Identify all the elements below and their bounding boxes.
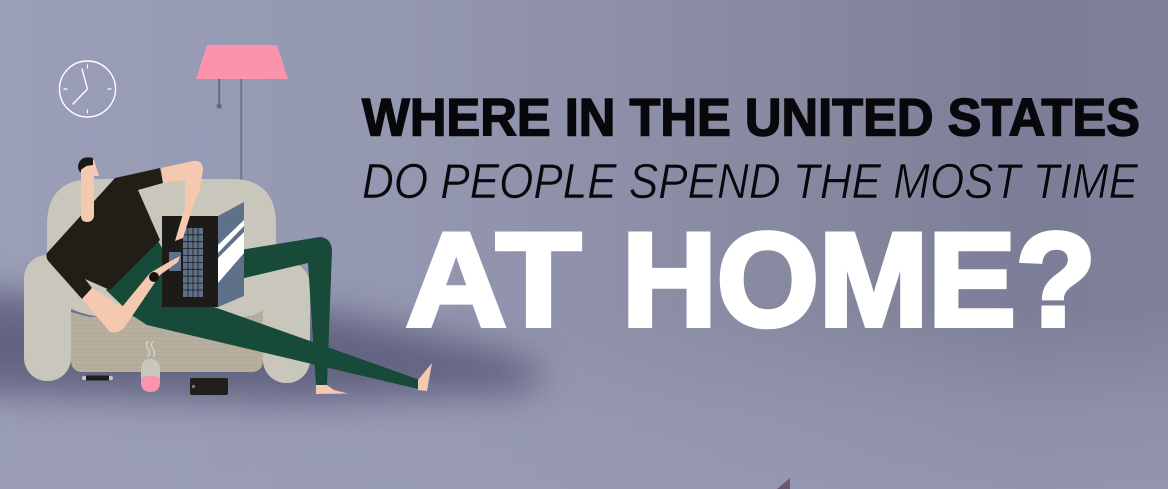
title line 3: AT (406, 206, 581, 354)
shirt (46, 168, 163, 299)
cropped map marker at bottom edge (777, 478, 790, 489)
foot: front (418, 363, 432, 391)
arm: lower, on laptop (82, 256, 180, 332)
illustration: person on sofa with laptop (46, 157, 432, 394)
illustration: sofa (24, 179, 310, 383)
front leg and hip (106, 235, 420, 389)
title line 1: WHERE IN THE UNITED STATES (362, 88, 1140, 147)
title line 3: HOME? (622, 206, 1096, 354)
foot: back (316, 385, 348, 394)
arm: upper, reaching to keyboard (161, 161, 203, 241)
head (78, 157, 99, 176)
laptop (162, 202, 244, 307)
icon: steaming mug (141, 341, 160, 392)
title (362, 88, 1140, 355)
watch (149, 272, 159, 282)
icon: wall clock (60, 61, 116, 117)
icon: floor lamp (196, 45, 288, 183)
arm: raised forearm (81, 166, 94, 222)
back leg (240, 237, 332, 385)
illustration: small items on floor (82, 376, 228, 395)
title line 3 (406, 206, 1096, 354)
